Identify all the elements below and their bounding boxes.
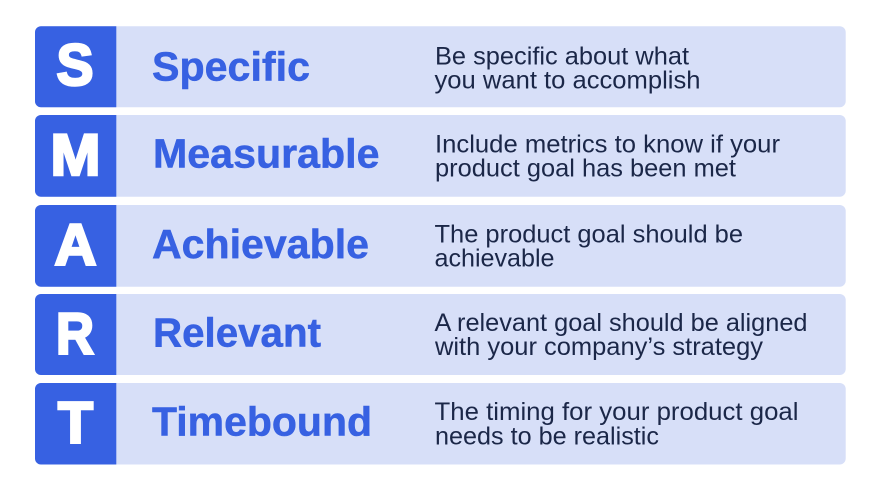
description: Relevant: A relevant goal should be aligned xyxy=(434,309,808,337)
row panel: Measurable xyxy=(35,115,846,197)
row panel: Relevant xyxy=(35,294,846,375)
row: Relevant xyxy=(35,294,846,375)
row panel: Achievable xyxy=(35,205,846,287)
description: Timebound: The timing for your product goal xyxy=(434,398,798,426)
description: Achievable: The product goal should be xyxy=(434,221,743,249)
letter block: T xyxy=(35,383,116,464)
heading: Timebound: Timebound xyxy=(152,399,372,445)
row panel: Specific xyxy=(35,26,846,107)
row: Measurable xyxy=(35,115,846,197)
letter: T: T xyxy=(58,391,93,456)
heading: Achievable: Achievable xyxy=(152,221,369,267)
letter block: A xyxy=(35,205,116,287)
letter block: M xyxy=(35,115,116,197)
letter: M: M xyxy=(50,123,100,188)
description: Achievable: achievable xyxy=(434,245,554,273)
letter: S: S xyxy=(56,33,94,98)
letter block: S xyxy=(35,26,116,107)
row panel: Timebound xyxy=(35,383,846,464)
row: Timebound xyxy=(35,383,846,464)
description: Specific: you want to accomplish xyxy=(434,66,700,94)
description: Measurable: product goal has been met xyxy=(435,155,736,183)
description: Measurable: Include metrics to know if your xyxy=(435,131,780,159)
letter: R: R xyxy=(56,302,94,367)
heading: Relevant: Relevant xyxy=(153,310,321,356)
row: Achievable xyxy=(35,205,846,287)
row: Specific xyxy=(35,26,846,107)
description: Timebound: needs to be realistic xyxy=(435,422,659,450)
description: Relevant: with your company’s strategy xyxy=(434,333,764,361)
description: Specific: Be specific about what xyxy=(435,42,689,70)
heading: Specific: Specific xyxy=(152,44,310,90)
letter: A: A xyxy=(54,213,96,278)
heading: Measurable: Measurable xyxy=(153,131,380,177)
letter block: R xyxy=(35,294,116,375)
